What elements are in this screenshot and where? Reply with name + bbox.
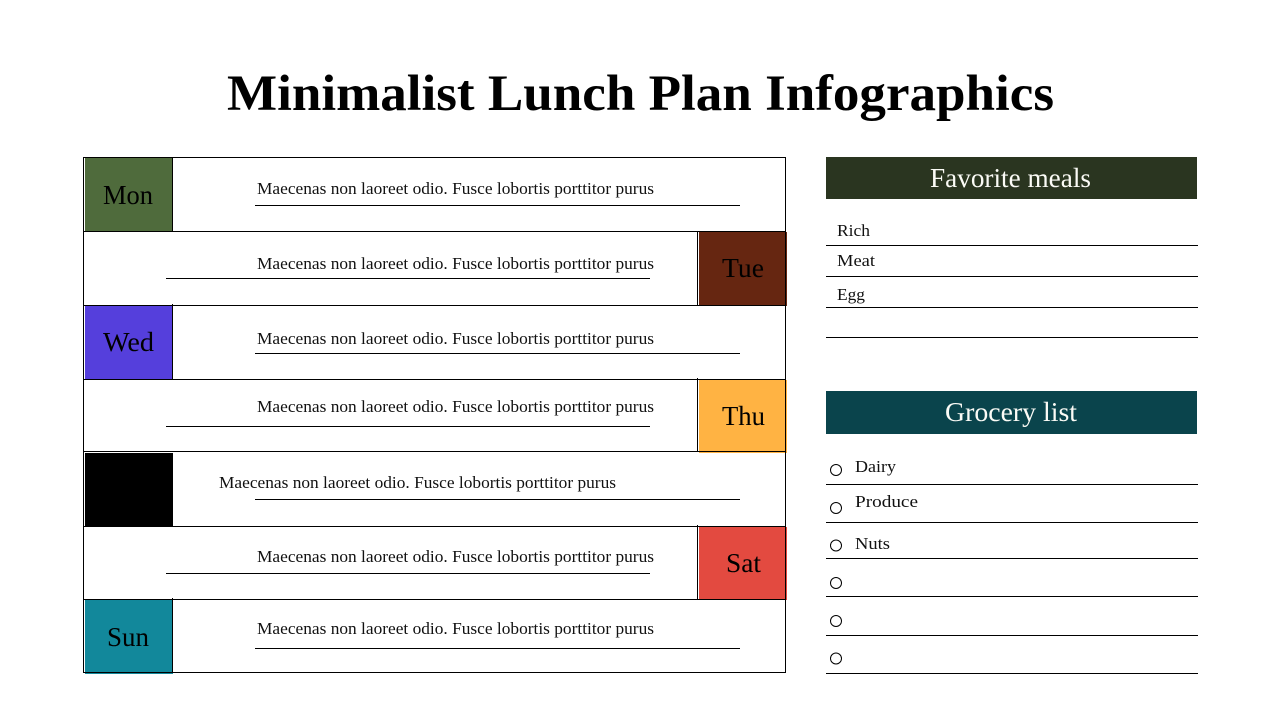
panel: weekly plan table: [84, 158, 787, 674]
list: favorite meals items: Meat: [837, 251, 875, 270]
row: Sunday: Sun: [107, 622, 149, 652]
row: Monday: Mon: [103, 180, 153, 210]
panel: favorite meals: [826, 157, 1198, 338]
list: grocery items: [826, 457, 1198, 674]
heading: grocery list: [826, 391, 1197, 434]
list: favorite meals items: Rich: [837, 221, 871, 240]
row: Tuesday: Maecenas non laoreet odio. Fusce lobortis porttitor purus: [257, 254, 654, 273]
row: Tuesday: [166, 231, 787, 306]
list: grocery items: Nuts: [855, 534, 890, 553]
list: grocery items: Produce: [855, 492, 918, 511]
row: Thursday: Maecenas non laoreet odio. Fusce lobortis porttitor purus: [257, 397, 654, 416]
row: Thursday: [166, 378, 787, 453]
row: Friday: Fri: [116, 474, 148, 504]
list: favorite meals items: Egg: [837, 285, 866, 304]
row: Thursday: Thu: [722, 401, 765, 431]
heading: favorite meals: [826, 157, 1197, 199]
row: Friday: Maecenas non laoreet odio. Fusce lobortis porttitor purus: [219, 473, 616, 492]
panel: grocery list: [826, 391, 1198, 674]
row: Wednesday: Wed: [103, 327, 155, 357]
row: Wednesday: Maecenas non laoreet odio. Fusce lobortis porttitor purus: [257, 329, 654, 348]
heading: grocery list: Grocery list: [945, 397, 1078, 427]
row: Saturday: [166, 525, 787, 600]
row: Wednesday: [85, 304, 740, 379]
row: Sunday: [85, 598, 740, 674]
row: Friday: [85, 453, 740, 526]
row: Saturday: Sat: [726, 548, 761, 578]
list: grocery items: Dairy: [855, 457, 897, 476]
list: favorite meals items: [826, 221, 1198, 338]
heading: favorite meals: Favorite meals: [930, 163, 1091, 193]
row: Monday: Maecenas non laoreet odio. Fusce lobortis porttitor purus: [257, 179, 654, 198]
title: Minimalist Lunch Plan Infographics: [227, 66, 1054, 122]
row: Tuesday: Tue: [722, 253, 764, 283]
row: Monday: [85, 158, 740, 231]
row: Saturday: Maecenas non laoreet odio. Fusce lobortis porttitor purus: [257, 547, 654, 566]
row: Sunday: Maecenas non laoreet odio. Fusce lobortis porttitor purus: [257, 619, 654, 638]
